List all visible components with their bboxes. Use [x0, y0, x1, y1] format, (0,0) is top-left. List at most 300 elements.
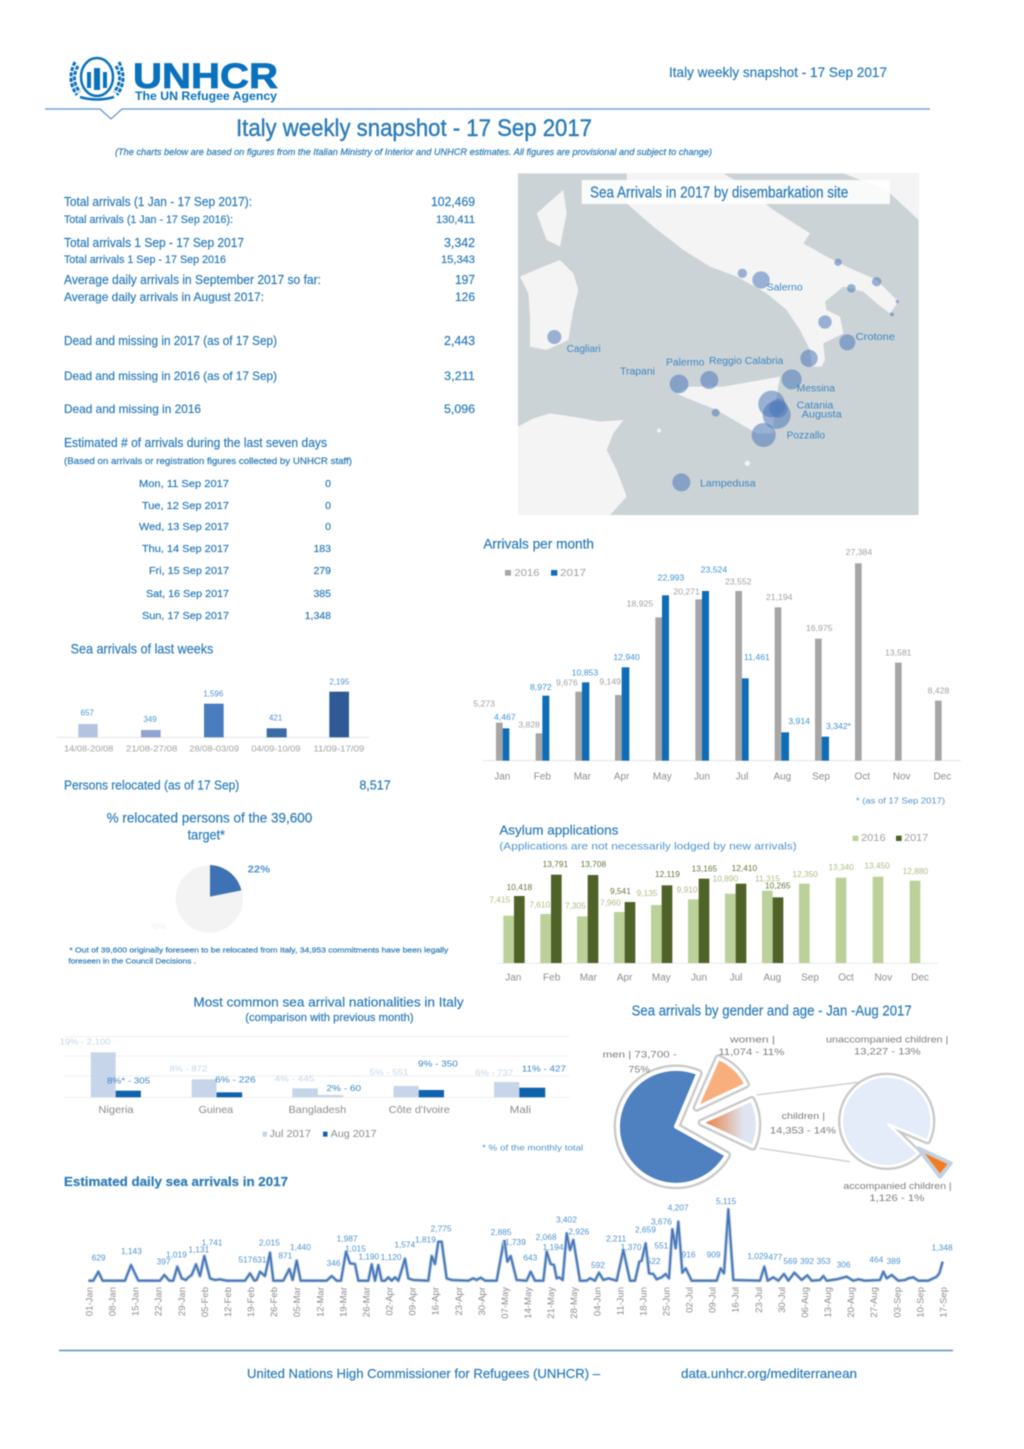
- sub heading: (comparison with previous month): [245, 1012, 414, 1024]
- pie labels: 11,074 - 11%: [718, 1047, 784, 1057]
- average daily September: 197: [455, 272, 475, 287]
- labels July: 19% - 2,100: [60, 1036, 111, 1046]
- line chart May to September: 522: [647, 1256, 661, 1266]
- country labels: Bangladesh: [288, 1105, 346, 1116]
- month axis labels: Mar: [574, 771, 592, 782]
- legend: 2017: [904, 833, 929, 844]
- data labels 2016: [473, 547, 950, 729]
- line chart January to May: 1,741: [202, 1237, 223, 1247]
- labels July: 4% - 445: [275, 1074, 315, 1084]
- subtitle: (The charts below are based on figures from the Italian Ministry of Interior and UNHCR estimates. All figures are provisional and subject to change): [115, 147, 712, 157]
- line chart May to September: 569: [783, 1256, 798, 1266]
- month axis labels: Nov: [874, 972, 892, 983]
- map title: [582, 180, 890, 204]
- data labels 2016: 20,271: [673, 587, 700, 597]
- date axis labels: 29-Jan: [177, 1287, 188, 1316]
- map bubbles: [547, 259, 899, 491]
- date axis labels: 10-Sep: [915, 1287, 926, 1318]
- relocation footnote: * Out of 39,600 originally foreseen to be relocated from Italy, 34,953 commitments have been legally: [69, 946, 449, 955]
- bar chart: weekly arrivals: 657: [81, 708, 95, 717]
- dead and missing 2016 to date: 3,211: [444, 369, 475, 383]
- line chart May to September: 2,926: [568, 1227, 590, 1237]
- line chart May to September: 392: [800, 1256, 814, 1266]
- date axis labels: 04-Jun: [592, 1287, 603, 1316]
- data labels 2016: 23,552: [725, 576, 752, 586]
- map site labels: Lampedusa: [700, 479, 756, 490]
- month axis labels: Jan: [494, 771, 510, 782]
- month axis labels: Dec: [933, 771, 951, 782]
- panel: key figures: [64, 194, 475, 416]
- date axis labels: 11-Jun: [615, 1287, 626, 1315]
- data labels 2016: 7,960: [600, 898, 621, 908]
- map site labels: Palermo: [666, 358, 705, 369]
- month axis labels: Aug: [763, 972, 781, 983]
- heading: Arrivals per month: [483, 535, 594, 551]
- map land masses: [518, 173, 919, 515]
- pie: men: [618, 1069, 727, 1185]
- date axis labels: 09-Apr: [408, 1287, 419, 1316]
- daily table: 183: [313, 543, 331, 555]
- panel: gender and age: [603, 1004, 952, 1203]
- line chart January to May: 1,819: [415, 1234, 436, 1244]
- average daily September: [64, 272, 475, 287]
- line chart May to September: 643: [523, 1253, 538, 1263]
- dead and missing 2017: Dead and missing in 2017 (as of 17 Sep): [64, 333, 277, 348]
- data labels 2016: 9,676: [556, 678, 578, 688]
- month axis labels: Sep: [812, 771, 830, 782]
- legend: Aug 2017: [331, 1129, 377, 1140]
- line chart May to September: 1,348: [932, 1243, 953, 1253]
- line chart May to September: 2,068: [536, 1232, 557, 1242]
- month axis labels: May: [653, 771, 672, 782]
- date axis labels: 18-Jun: [638, 1287, 649, 1316]
- data labels 2017: 23,524: [701, 564, 727, 574]
- line chart January to May: 631: [253, 1255, 267, 1265]
- data labels 2016: 9,135: [637, 888, 658, 898]
- date axis labels: 21-May: [546, 1287, 557, 1319]
- line chart January to May: 346: [327, 1258, 341, 1268]
- data labels 2017: 13,708: [581, 859, 607, 869]
- data labels 2016: 12,880: [903, 866, 929, 876]
- data labels 2016: 8,428: [928, 685, 950, 695]
- map site labels: Crotone: [856, 332, 895, 343]
- data labels 2017: 13,791: [543, 859, 569, 869]
- pie: children: [702, 1100, 757, 1147]
- footer credit: United Nations High Commissioner for Refugees (UNHCR) –: [247, 1366, 601, 1381]
- date axis labels: 16-Apr: [431, 1287, 442, 1316]
- heading: Asylum applications: [499, 822, 619, 837]
- note: * % of the monthly total: [482, 1143, 583, 1153]
- date axis labels: 30-Apr: [477, 1287, 488, 1316]
- total arrivals 2016: [64, 214, 475, 226]
- labels August: 9% - 350: [418, 1058, 458, 1068]
- month axis labels: Mar: [580, 972, 598, 983]
- bar chart 2017: [514, 875, 783, 963]
- line chart January to May: 2,775: [431, 1223, 452, 1233]
- labels July: 5% - 551: [370, 1067, 409, 1077]
- date axis labels: 12-Feb: [223, 1287, 234, 1317]
- daily table: Thu, 14 Sep 2017: [142, 543, 229, 555]
- line chart May to September: 592: [591, 1260, 605, 1270]
- data labels 2017: 10,853: [572, 668, 598, 678]
- date axis labels: 02-Apr: [384, 1287, 396, 1316]
- panel: last seven days: [64, 435, 352, 622]
- panel: daily arrivals: [64, 1174, 953, 1319]
- September arrivals 2017: 3,342: [444, 235, 475, 250]
- line chart January to May: 1,120: [381, 1252, 402, 1262]
- total arrivals 2017: Total arrivals (1 Jan - 17 Sep 2017):: [64, 194, 252, 209]
- heading: sea arrivals of last weeks: Sea arrivals of last weeks: [71, 640, 213, 656]
- line chart May to September: 464: [869, 1254, 884, 1264]
- line chart May to September: 1,739: [505, 1237, 526, 1247]
- average daily August: 126: [455, 290, 475, 304]
- pie chart: relocated share: 78%: [150, 922, 166, 931]
- labels August: 11% - 427: [522, 1064, 566, 1074]
- data labels 2017: 9,541: [610, 886, 631, 896]
- data labels 2016: 13,340: [828, 862, 854, 872]
- month axis labels: Jan: [505, 972, 521, 983]
- data labels 2016: 9,910: [677, 884, 698, 894]
- legend: [263, 1129, 377, 1140]
- panel: asylum applications: [489, 822, 938, 983]
- axis line: [483, 759, 961, 762]
- pie labels: children |: [782, 1111, 825, 1121]
- line chart May to September: 5,115: [716, 1196, 737, 1206]
- pie labels: 75%: [628, 1064, 650, 1074]
- dead and missing 2016 to date: Dead and missing in 2016 (as of 17 Sep): [64, 369, 277, 383]
- pie labels: 1,126 - 1%: [869, 1193, 924, 1203]
- date axis labels: 23-Apr: [454, 1287, 465, 1316]
- relocation footnote: [68, 946, 449, 965]
- line chart January to May: 871: [278, 1250, 293, 1260]
- data labels 2016: 3,828: [518, 719, 540, 729]
- data labels 2017: 10,418: [507, 882, 533, 892]
- legend: 2016: [514, 568, 540, 579]
- date axis labels: 14-May: [523, 1287, 534, 1319]
- data labels 2016: [489, 860, 929, 910]
- month axis labels: Feb: [543, 972, 561, 983]
- heading: Estimated daily sea arrivals in 2017: [64, 1174, 288, 1189]
- date axis labels: 02-Jul: [685, 1287, 696, 1313]
- total arrivals 2016: 130,411: [436, 214, 475, 226]
- data labels 2017: 12,119: [655, 869, 680, 879]
- line chart January to May: 1,143: [121, 1246, 142, 1256]
- bar chart 2017: [503, 591, 829, 761]
- date axis labels: 13-Aug: [823, 1287, 834, 1318]
- pie chart: relocated share: [150, 864, 270, 933]
- pie: women: [697, 1058, 746, 1108]
- line chart January to May: 2,015: [259, 1237, 280, 1247]
- labels August: 6% - 226: [215, 1074, 256, 1084]
- panel: last weeks and relocation: [57, 640, 449, 965]
- data labels 2016: 18,925: [627, 599, 653, 609]
- daily table: Sat, 16 Sep 2017: [146, 588, 229, 600]
- date axis labels: 25-Jun: [662, 1287, 672, 1316]
- map site labels: Catania: [797, 400, 834, 411]
- connector lines: [757, 1082, 858, 1162]
- month axis labels: Sep: [801, 972, 819, 983]
- country labels: Côte d'Ivoire: [389, 1105, 450, 1116]
- line chart January to May: [88, 1223, 512, 1281]
- bars July: [91, 1052, 519, 1097]
- bar chart: weekly arrivals: [57, 677, 369, 754]
- header rule with notch: [45, 109, 930, 119]
- bars August: [116, 1088, 545, 1097]
- month axis labels: Oct: [838, 972, 854, 983]
- month axis labels: Jul: [736, 771, 748, 782]
- data labels 2017: 3,342*: [826, 721, 852, 731]
- daily table: 0: [325, 521, 331, 533]
- line chart May to September: 3,676: [651, 1216, 672, 1226]
- data labels 2016: 16,975: [806, 623, 833, 633]
- labels July: 8% - 872: [169, 1064, 208, 1074]
- bar chart 2016: [496, 563, 942, 761]
- date axis labels: 15-Jan: [131, 1287, 142, 1316]
- September arrivals 2016: Total arrivals 1 Sep - 17 Sep 2016: [64, 254, 226, 266]
- date axis labels: 26-Mar: [362, 1287, 372, 1317]
- bar chart 2016: [503, 877, 920, 963]
- data labels 2017: 10,265: [765, 881, 791, 891]
- month axis labels: [505, 972, 929, 983]
- bar chart: weekly arrivals: 04/09-10/09: [251, 745, 301, 754]
- date axis labels: 03-Sep: [892, 1287, 903, 1318]
- date axis labels: 19-Mar: [338, 1287, 349, 1317]
- daily table: 279: [313, 565, 331, 577]
- header right title: Italy weekly snapshot - 17 Sep 2017: [669, 64, 887, 80]
- bar chart: weekly arrivals: 28/08-03/09: [189, 745, 240, 754]
- data labels 2017: 12,940: [613, 652, 640, 662]
- date axis labels: [84, 1287, 950, 1319]
- data labels 2016: 5,273: [473, 699, 495, 709]
- pie labels: 13,227 - 13%: [854, 1046, 921, 1056]
- footer link: data.unhcr.org/mediterranean: [681, 1366, 857, 1381]
- pie labels: 14,353 - 14%: [770, 1125, 836, 1135]
- pie labels: women |: [729, 1034, 775, 1044]
- data labels 2016: 13,450: [864, 860, 890, 870]
- daily table: 0: [325, 500, 331, 512]
- bar chart: weekly arrivals: 1,596: [203, 689, 224, 698]
- heading: Most common sea arrival nationalities in Italy: [193, 995, 464, 1010]
- month axis labels: Jun: [694, 771, 710, 782]
- daily table: Mon, 11 Sep 2017: [139, 478, 229, 490]
- average daily September: Average daily arrivals in September 2017 so far:: [64, 272, 321, 287]
- line chart January to May: 1,190: [358, 1251, 380, 1261]
- daily table: Fri, 15 Sep 2017: [149, 565, 229, 577]
- daily table: Wed, 13 Sep 2017: [139, 521, 229, 533]
- bar chart: weekly arrivals: 421: [269, 714, 283, 723]
- dead and missing 2016 total: [64, 402, 475, 416]
- dead and missing 2016 total: Dead and missing in 2016: [64, 402, 201, 416]
- line chart January to May: 1,987: [337, 1233, 358, 1243]
- persons relocated: [64, 777, 391, 792]
- pie labels: unaccompanied children |: [826, 1034, 948, 1044]
- line chart January to May: 1,019: [166, 1249, 187, 1259]
- date axis labels: 22-Jan: [154, 1287, 165, 1316]
- map site labels: Salerno: [767, 283, 803, 294]
- title: Italy weekly snapshot - 17 Sep 2017: [236, 115, 592, 142]
- data labels 2017: 4,467: [494, 712, 516, 722]
- month axis labels: [494, 771, 951, 782]
- relocation footnote: foreseen in the Council Decisions .: [68, 956, 196, 965]
- line chart January to May: 1,015: [345, 1244, 366, 1254]
- heading: Estimated # of arrivals during the last seven days: [64, 435, 327, 450]
- note: (Based on arrivals or registration figures collected by UNHCR staff): [64, 456, 352, 466]
- date axis labels: 23-Jul: [754, 1287, 765, 1313]
- data labels 2017: 12,410: [732, 863, 758, 873]
- line chart May to September: 1,370: [621, 1242, 642, 1252]
- logo wordmark: UNHCR: [133, 57, 278, 96]
- date axis labels: 20-Aug: [846, 1287, 857, 1318]
- date axis labels: 07-May: [500, 1287, 511, 1319]
- legend: 2016: [861, 833, 886, 844]
- line chart May to September: 3,402: [556, 1215, 577, 1225]
- data labels 2016: 10,890: [713, 874, 739, 884]
- country labels: [98, 1105, 531, 1116]
- line chart January to May: 1,440: [290, 1242, 311, 1252]
- bar chart: weekly arrivals: 11/09-17/09: [313, 745, 365, 754]
- footer: [59, 1350, 953, 1381]
- legend: Jul 2017: [269, 1129, 311, 1140]
- date axis labels: 27-Aug: [869, 1287, 880, 1318]
- date axis labels: 16-Jul: [731, 1287, 742, 1313]
- date axis labels: 09-Jul: [708, 1287, 719, 1313]
- data labels 2016: 9,149: [599, 676, 621, 686]
- line chart January to May: 397: [157, 1256, 171, 1266]
- data labels 2016: 11,315: [755, 874, 780, 884]
- pie labels: [603, 1034, 952, 1203]
- daily table: 0: [325, 478, 331, 490]
- legend: [505, 568, 587, 579]
- heading: relocation target: [107, 809, 313, 842]
- country labels: Mali: [510, 1105, 531, 1116]
- pie labels: accompanied children |: [843, 1181, 952, 1191]
- logo tagline: The UN Refugee Agency: [135, 91, 278, 103]
- panel: map of disembarkation sites: [518, 173, 919, 515]
- pie chart: relocated share: 22%: [248, 864, 270, 875]
- month axis labels: Aug: [773, 771, 791, 782]
- legend: 2017: [560, 568, 587, 579]
- date axis labels: 28-May: [569, 1287, 580, 1319]
- September arrivals 2016: 15,343: [441, 254, 475, 266]
- total arrivals 2017: [64, 194, 475, 209]
- map site labels: Cagliari: [567, 344, 601, 355]
- bar chart: weekly arrivals: 21/08-27/08: [126, 745, 178, 754]
- line chart May to September: 2,211: [606, 1234, 627, 1244]
- map title: Sea Arrivals in 2017 by disembarkation site: [590, 184, 849, 201]
- line chart January to May: 1,574: [394, 1239, 416, 1249]
- map site labels: Trapani: [620, 366, 655, 377]
- labels August: 2% - 60: [326, 1083, 361, 1093]
- date axis labels: 05-Mar: [292, 1287, 303, 1317]
- September arrivals 2016: [64, 254, 475, 266]
- line chart May to September: 389: [887, 1256, 901, 1266]
- month axis labels: Jul: [730, 972, 742, 983]
- data labels 2016: 7,610: [529, 900, 551, 910]
- line chart January to May: 629: [92, 1253, 106, 1263]
- month axis labels: May: [652, 972, 671, 983]
- map site labels: Augusta: [802, 410, 842, 421]
- daily table: [139, 478, 331, 622]
- map site labels: Messina: [797, 384, 835, 395]
- icon: UNHCR logo emblem: [71, 58, 123, 100]
- average daily August: [64, 290, 475, 304]
- month axis labels: Nov: [893, 771, 911, 782]
- date axis labels: 01-Jan: [84, 1287, 96, 1316]
- line chart January to May: 1,131: [188, 1244, 210, 1254]
- line chart May to September: 2,659: [635, 1225, 656, 1235]
- dead and missing 2016 total: 5,096: [444, 402, 475, 416]
- line chart May to September: 353: [817, 1256, 831, 1266]
- line chart May to September: 916: [682, 1249, 696, 1259]
- month axis labels: Jun: [691, 972, 707, 983]
- heading: Sea arrivals by gender and age - Jan -Aug 2017: [632, 1004, 912, 1020]
- panel: nationalities: [60, 995, 583, 1153]
- map site labels: [567, 283, 895, 490]
- daily table: 385: [313, 588, 331, 600]
- September arrivals 2017: [64, 235, 475, 250]
- month axis labels: Apr: [614, 771, 630, 782]
- date axis labels: 30-Jul: [777, 1287, 788, 1313]
- footnote: * (as of 17 Sep 2017): [856, 795, 945, 805]
- bar chart: weekly arrivals: 2,195: [329, 677, 350, 686]
- date axis labels: 26-Feb: [269, 1287, 280, 1317]
- legend: [853, 833, 929, 844]
- data labels 2017: 11,461: [744, 652, 770, 662]
- header: [45, 57, 930, 119]
- data labels 2016: 7,305: [565, 900, 586, 910]
- total arrivals 2017: 102,469: [431, 194, 475, 209]
- labels July: [60, 1036, 513, 1084]
- country labels: Guinea: [199, 1105, 234, 1116]
- line chart May to September: [504, 1196, 953, 1281]
- average daily August: Average daily arrivals in August 2017:: [64, 290, 264, 304]
- map site labels: Reggio Calabria: [709, 356, 784, 367]
- pie: unaccompanied children: [842, 1076, 932, 1166]
- month axis labels: Apr: [617, 972, 633, 983]
- dead and missing 2016 to date: [64, 369, 475, 383]
- grid lines: [64, 1037, 569, 1097]
- data labels 2016: 21,194: [766, 592, 793, 602]
- dead and missing 2017: [64, 333, 475, 348]
- pie: accompanied children: [918, 1148, 951, 1177]
- data labels 2016: 7,415: [489, 894, 511, 904]
- September arrivals 2017: Total arrivals 1 Sep - 17 Sep 2017: [64, 235, 244, 250]
- date axis labels: 08-Jan: [108, 1287, 119, 1316]
- line chart May to September: 477: [768, 1252, 783, 1262]
- country labels: Nigeria: [98, 1105, 134, 1116]
- persons relocated: 8,517: [359, 777, 391, 792]
- daily table: Sun, 17 Sep 2017: [142, 610, 229, 622]
- daily table: 1,348: [305, 610, 331, 622]
- line chart January to May: 2,885: [491, 1227, 512, 1237]
- map site labels: Pozzallo: [787, 430, 825, 441]
- line chart May to September: 306: [837, 1260, 851, 1270]
- axis line: [497, 962, 938, 965]
- persons relocated: Persons relocated (as of 17 Sep): [64, 777, 239, 792]
- month axis labels: Feb: [534, 771, 551, 782]
- date axis labels: 05-Feb: [200, 1287, 211, 1317]
- data labels 2017: [507, 859, 791, 896]
- dead and missing 2017: 2,443: [444, 333, 475, 348]
- date axis labels: 06-Aug: [800, 1287, 811, 1318]
- labels August: 8%* - 305: [107, 1076, 151, 1086]
- data labels 2016: 13,581: [885, 647, 912, 657]
- data labels 2016: 27,384: [846, 547, 872, 557]
- date axis labels: 12-Mar: [315, 1287, 326, 1317]
- line chart May to September: 1,194: [543, 1242, 564, 1252]
- panel: arrivals per month: [473, 535, 961, 805]
- line chart May to September: 1,029: [747, 1251, 769, 1261]
